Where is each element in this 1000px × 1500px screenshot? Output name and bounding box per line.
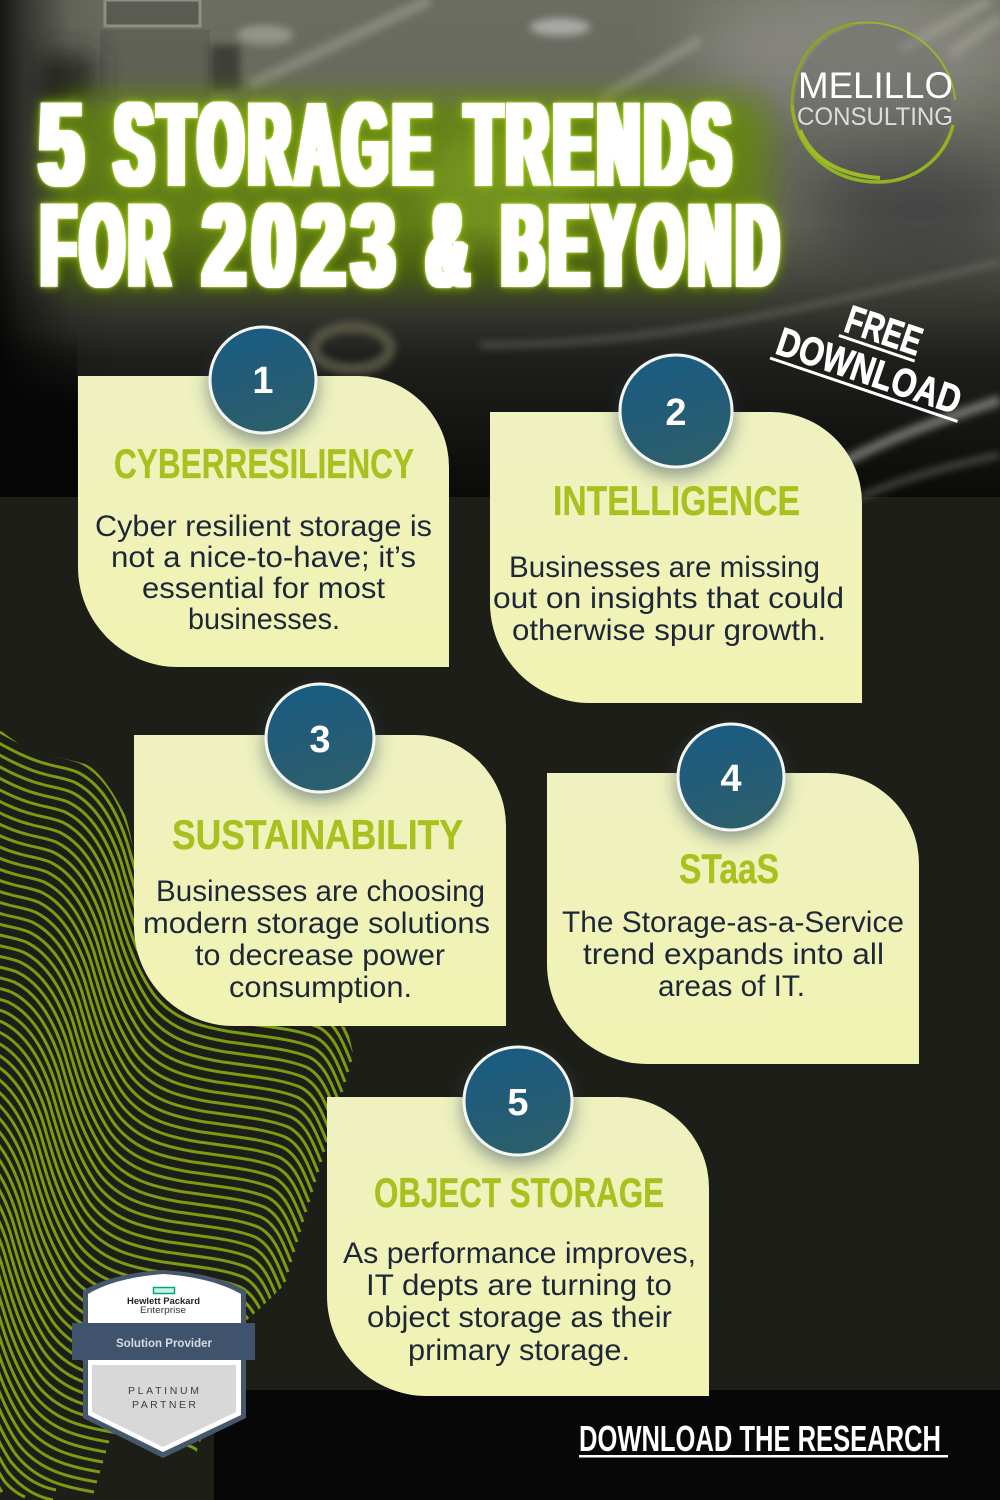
body 5 [343, 1237, 696, 1367]
badge: HPE platinum partner [72, 1270, 255, 1458]
card 5: object storage [327, 1047, 709, 1396]
title: 2023 [203, 180, 402, 312]
logo: Melillo Consulting [792, 22, 955, 182]
heading 1: CYBERRESILIENCY [114, 440, 414, 487]
free download callout: FREE [840, 298, 928, 364]
card 4: staas [547, 724, 919, 1064]
title: FOR [42, 180, 174, 312]
heading 4: STaaS [679, 845, 779, 892]
body 3: consumption. [229, 971, 412, 1004]
body 5: object storage as their [367, 1301, 672, 1334]
number badge 1: 1 [252, 360, 274, 402]
body 1: Cyber resilient storage is [95, 510, 432, 543]
body 3: modern storage solutions [143, 907, 490, 940]
body 4: areas of IT. [658, 970, 805, 1003]
badge: HPE platinum partner: Hewlett Packard [127, 1296, 200, 1307]
body 2: otherwise spur growth. [512, 614, 826, 647]
number badge 4 [678, 724, 784, 830]
number badge 3 [266, 684, 374, 792]
body 4: trend expands into all [583, 938, 884, 971]
logo: Melillo Consulting: MELILLO [798, 65, 953, 106]
heading 3: SUSTAINABILITY [172, 811, 463, 858]
card 1: cyberresiliency [78, 327, 449, 667]
title: & [427, 180, 474, 312]
number badge 5: 5 [507, 1082, 529, 1124]
badge: HPE platinum partner: Enterprise [140, 1305, 186, 1316]
card 3: sustainability [134, 684, 506, 1026]
badge: HPE platinum partner: PLATINUM [128, 1385, 199, 1397]
heading 5: OBJECT STORAGE [374, 1169, 664, 1216]
badge: HPE platinum partner: PARTNER [132, 1399, 196, 1411]
badge: HPE platinum partner: Solution Provider [116, 1336, 212, 1350]
number badge 2: 2 [665, 392, 687, 434]
body 2 [493, 551, 844, 647]
title: 5 [40, 79, 90, 211]
card 2: intelligence [490, 355, 862, 703]
body 1: businesses. [188, 603, 340, 636]
title: STORAGE [115, 79, 437, 211]
free download callout [769, 278, 984, 424]
logo: Melillo Consulting: CONSULTING [797, 103, 953, 131]
body 2: Businesses are missing [509, 551, 820, 584]
body 3: to decrease power [195, 939, 445, 972]
title [40, 79, 784, 312]
body 1: not a nice-to-have; it’s [111, 541, 416, 574]
heading 2: INTELLIGENCE [553, 477, 800, 524]
number badge 2 [620, 355, 732, 467]
body 1 [95, 510, 432, 636]
body 4 [562, 906, 904, 1003]
body 5: primary storage. [408, 1334, 630, 1367]
decorative green wave lines [0, 732, 360, 1500]
number badge 4: 4 [720, 758, 742, 800]
body 3 [143, 875, 490, 1004]
number badge 5 [464, 1047, 572, 1155]
body 1: essential for most [142, 572, 386, 605]
number badge 3: 3 [309, 719, 331, 761]
body 5: As performance improves, [343, 1237, 696, 1270]
body 4: The Storage-as-a-Service [562, 906, 904, 939]
body 5: IT depts are turning to [366, 1269, 672, 1302]
body 2: out on insights that could [493, 582, 844, 615]
body 3: Businesses are choosing [156, 875, 485, 908]
number badge 1 [210, 327, 316, 433]
